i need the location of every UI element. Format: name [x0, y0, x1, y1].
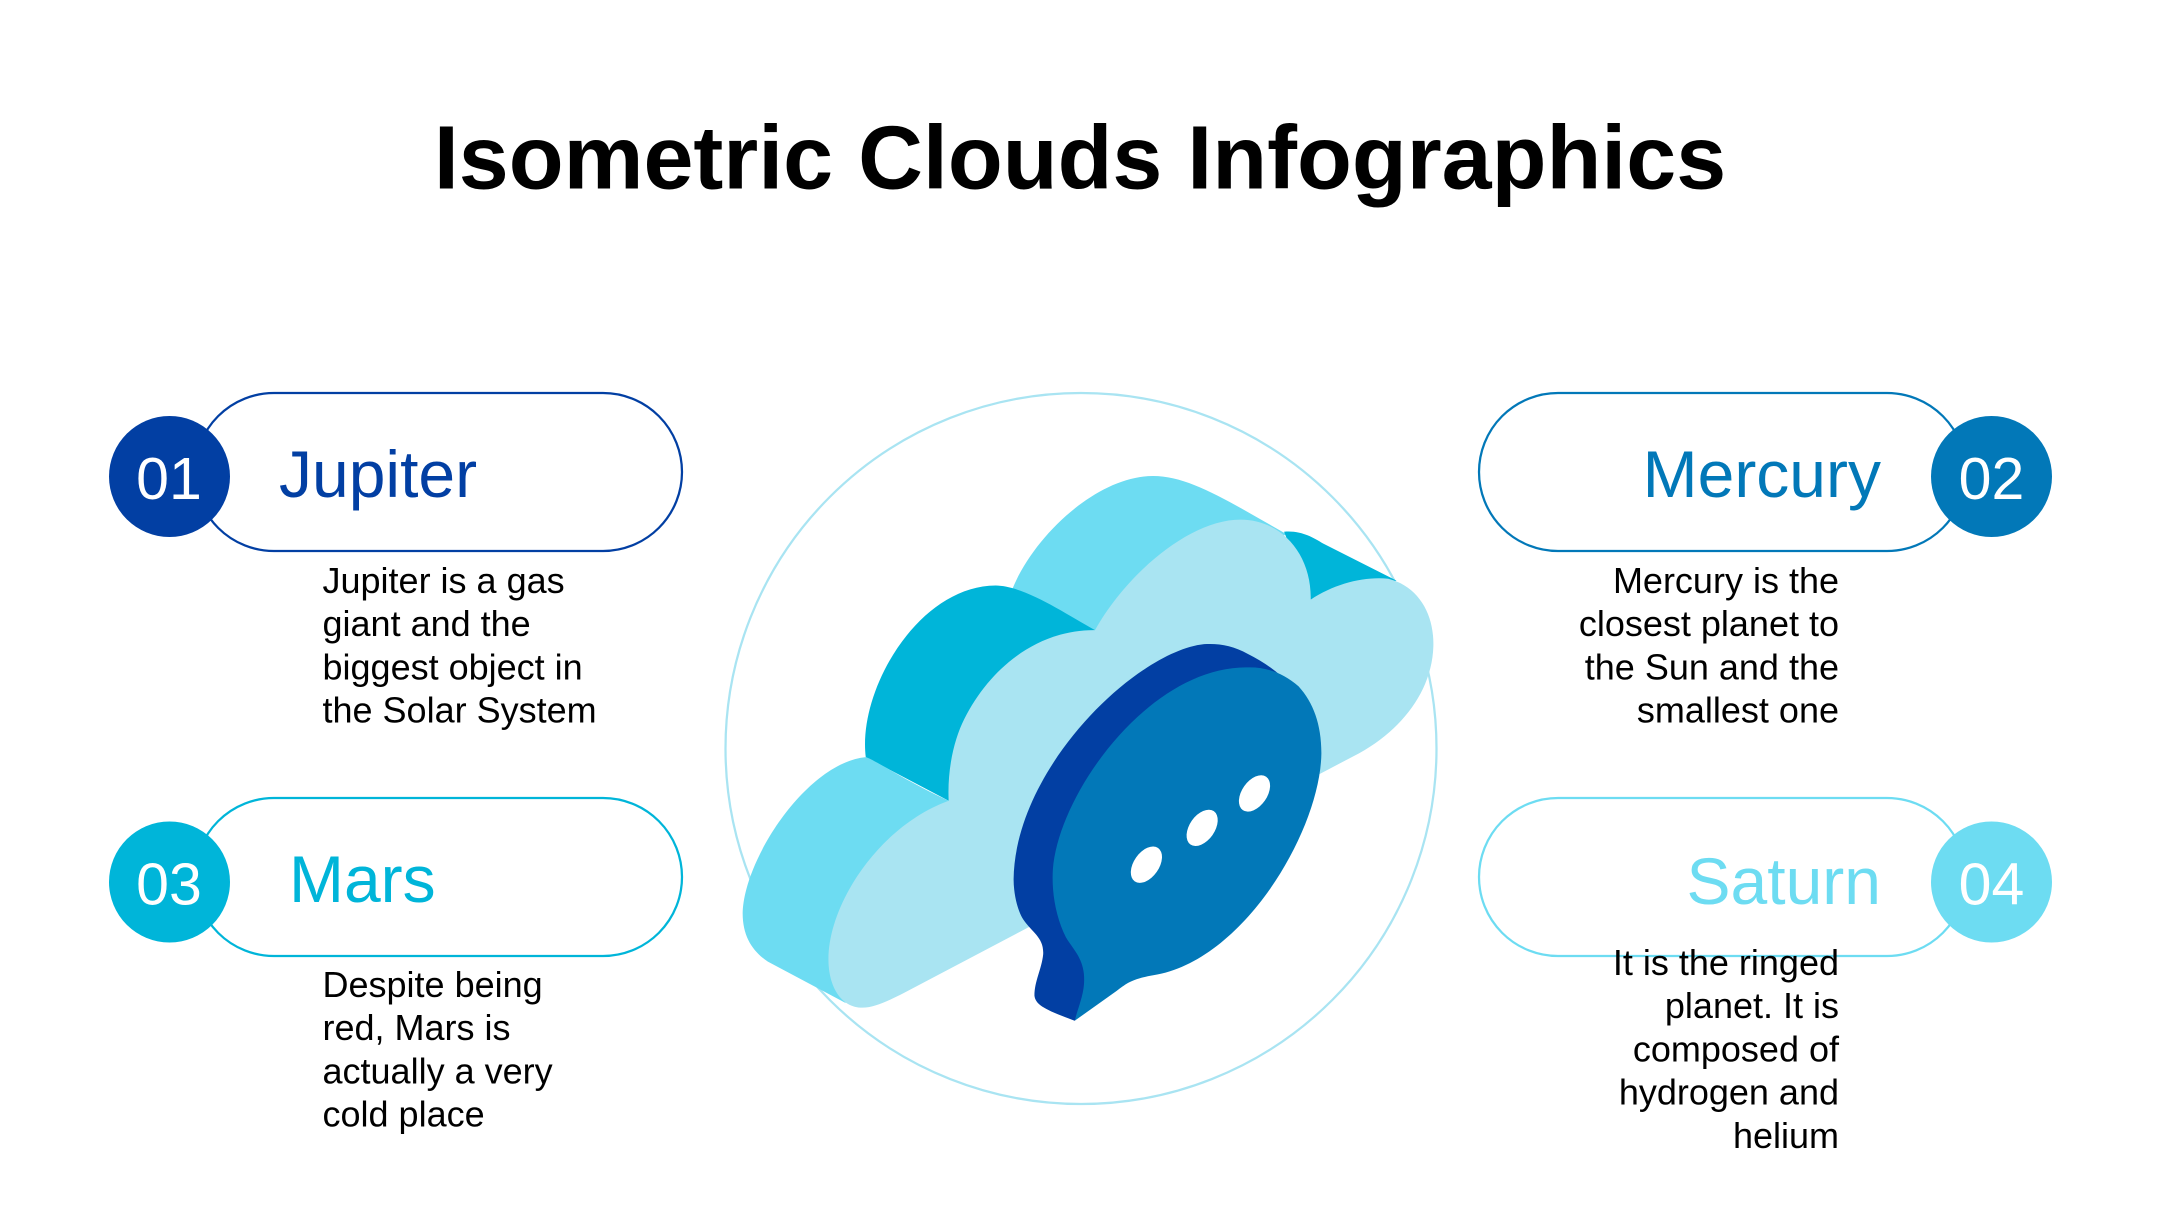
- panel: 04 Saturn: composed of: [1633, 1028, 1840, 1069]
- panel: 04 Saturn: hydrogen and: [1619, 1072, 1839, 1113]
- panel: 03 Mars: [109, 798, 682, 1135]
- cloud: [743, 476, 1433, 1021]
- panel: 01 Jupiter: 01: [136, 446, 202, 512]
- central illustration: isometric cloud with speech bubble: [726, 393, 1436, 1104]
- panel: 02 Mercury: closest planet to: [1579, 603, 1839, 644]
- ring behind cloud: [726, 393, 1436, 1104]
- panel: 02 Mercury: Mercury: [1643, 437, 1881, 511]
- panel: 01 Jupiter: giant and the: [322, 603, 531, 644]
- panel: 01 Jupiter: biggest object in: [322, 646, 583, 687]
- panel: 01 Jupiter: the Solar System: [322, 690, 597, 731]
- panel: 03 Mars: red, Mars is: [322, 1007, 511, 1048]
- panel: 02 Mercury: the Sun and the: [1585, 646, 1839, 687]
- panel: 03 Mars: cold place: [322, 1094, 485, 1135]
- panel: 02 Mercury: smallest one: [1637, 690, 1839, 731]
- panel: 04 Saturn: 04: [1959, 852, 2024, 918]
- panel: 04 Saturn: [1479, 798, 2052, 1156]
- panel: 02 Mercury: [1479, 393, 2052, 731]
- panel: 02 Mercury: 02: [1959, 446, 2024, 512]
- panel: 03 Mars: Mars: [289, 842, 436, 916]
- panel: 01 Jupiter: [109, 393, 682, 731]
- panel: 01 Jupiter: Jupiter: [279, 437, 477, 511]
- panel: 01 Jupiter: Jupiter is a gas: [322, 560, 565, 601]
- panel: 04 Saturn: Saturn: [1687, 844, 1881, 918]
- speech bubble: [1014, 644, 1281, 1021]
- title: Isometric Clouds Infographics: [434, 108, 1726, 208]
- panel: 02 Mercury: Mercury is the: [1613, 560, 1839, 601]
- panel: 04 Saturn: helium: [1733, 1115, 1839, 1156]
- panel: 03 Mars: 03: [136, 852, 202, 918]
- panel: 03 Mars: Despite being: [322, 964, 543, 1005]
- panel: 03 Mars: actually a very: [322, 1050, 553, 1091]
- panel: 04 Saturn: planet. It is: [1665, 985, 1839, 1026]
- panel: 04 Saturn: It is the ringed: [1613, 942, 1839, 983]
